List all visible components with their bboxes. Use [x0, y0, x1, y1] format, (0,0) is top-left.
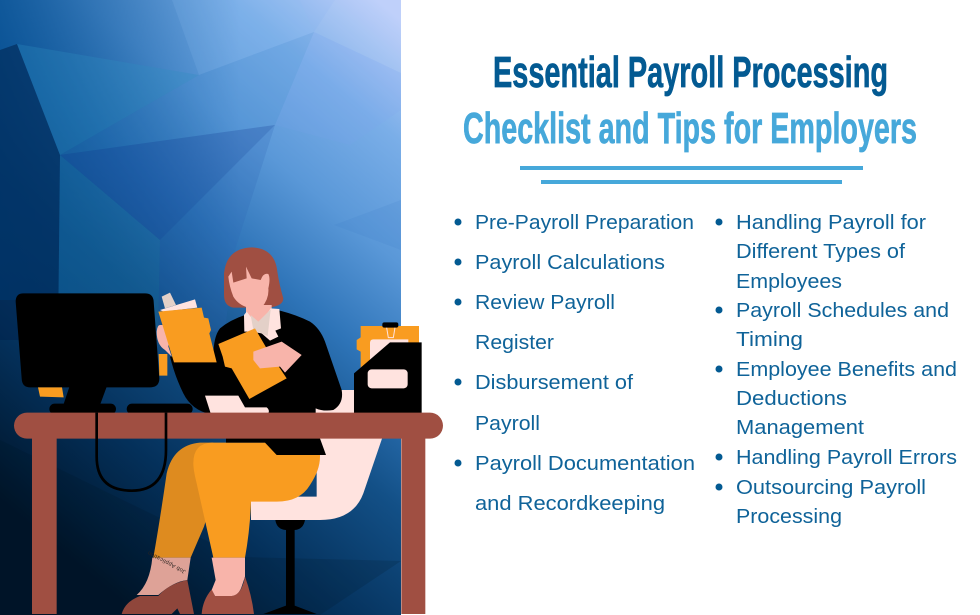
right folder and hand	[218, 328, 302, 399]
list: right column: Employees	[736, 270, 842, 293]
monitor and keyboard	[16, 293, 193, 414]
list: right column: Employee Benefits and	[736, 358, 957, 381]
list: right column: Deductions	[736, 387, 847, 410]
list: left column: Disbursement of	[475, 371, 633, 394]
back leg	[122, 443, 213, 614]
list: left column: Payroll Documentation	[475, 452, 695, 475]
list: right column: Different Types of	[736, 240, 905, 263]
title	[463, 48, 917, 153]
head and collar	[224, 247, 283, 341]
list: right column: Timing	[736, 328, 803, 351]
jacket hem	[226, 437, 326, 455]
list: left column: Review Payroll	[475, 291, 615, 314]
list: left column: Register	[475, 331, 554, 354]
cable	[97, 413, 166, 491]
jacket	[170, 311, 342, 414]
front leg	[193, 443, 320, 614]
small rotated caption: Job Application	[147, 549, 187, 574]
list: left column: Payroll	[475, 412, 540, 435]
list: left column: Payroll Calculations	[475, 251, 665, 274]
list: left column: and Recordkeeping	[475, 492, 665, 515]
paper on desk	[205, 396, 269, 413]
file cabinet	[354, 322, 422, 414]
list: right column: Handling Payroll for	[736, 211, 926, 234]
list: right column: Outsourcing Payroll	[736, 476, 926, 499]
list: right column: Processing	[736, 505, 842, 528]
illustration: woman at desk	[14, 247, 443, 614]
left book and hand	[157, 293, 217, 362]
list: right column: Payroll Schedules and	[736, 299, 949, 322]
panel: polygon background	[0, 0, 401, 615]
list: left column: Pre-Payroll Preparation	[475, 211, 694, 234]
title underlines	[520, 166, 863, 184]
chair	[251, 390, 383, 614]
list: right column: Handling Payroll Errors	[736, 446, 957, 469]
list: right column	[716, 211, 957, 528]
desk	[14, 413, 443, 614]
list: right column: Management	[736, 416, 864, 439]
list: left column	[454, 211, 695, 515]
